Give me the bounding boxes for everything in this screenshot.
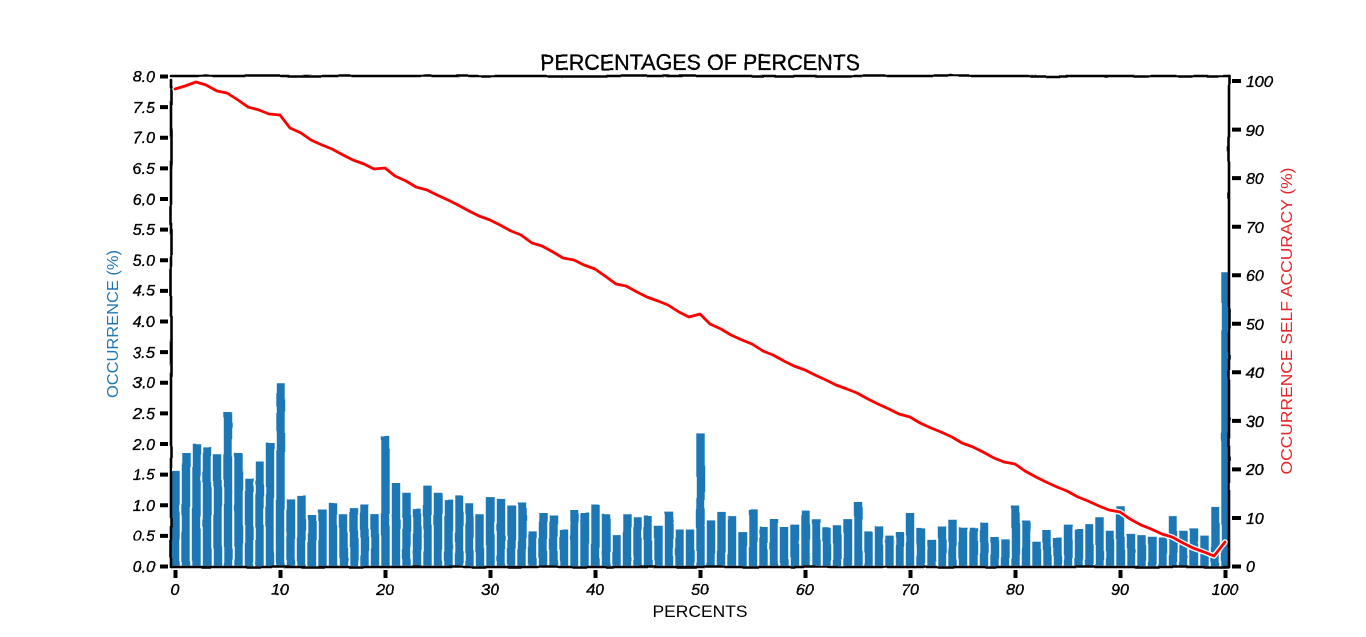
right axis ticks and labels: 60 — [1246, 268, 1264, 285]
bottom axis ticks and labels: 20 — [375, 582, 394, 599]
left axis ticks and labels: 7.0 — [133, 130, 155, 147]
right axis ticks and labels: 10 — [1246, 511, 1264, 528]
left axis ticks and labels: 2.5 — [132, 406, 155, 423]
left axis ticks and labels — [132, 69, 168, 576]
right axis ticks and labels: 100 — [1246, 74, 1273, 91]
bottom axis ticks and labels: 60 — [796, 582, 814, 599]
right axis ticks and labels: 0 — [1246, 559, 1255, 576]
right axis ticks and labels — [1232, 74, 1273, 576]
bottom axis ticks and labels: 10 — [271, 582, 289, 599]
left axis ticks and labels: 1.5 — [133, 467, 155, 484]
bottom axis ticks and labels: 40 — [586, 582, 604, 599]
bar chart: occurrence by percent value — [171, 272, 1230, 566]
left axis ticks and labels: 6.5 — [133, 161, 155, 178]
left axis ticks and labels: 0.0 — [133, 559, 155, 576]
left axis ticks and labels: 3.5 — [133, 345, 155, 362]
right axis ticks and labels: 80 — [1246, 171, 1264, 188]
bottom axis ticks and labels: 50 — [691, 582, 709, 599]
right axis ticks and labels: 70 — [1246, 220, 1264, 237]
right axis ticks and labels: 90 — [1246, 123, 1264, 140]
left axis ticks and labels: 8.0 — [133, 69, 155, 86]
left axis ticks and labels: 5.5 — [133, 222, 155, 239]
right y axis label: OCCURRENCE SELF ACCURACY (%) — [1279, 168, 1296, 474]
title: PERCENTAGES OF PERCENTS — [540, 50, 860, 75]
right axis ticks and labels: 20 — [1245, 462, 1264, 479]
x axis label: PERCENTS — [652, 602, 748, 621]
right axis ticks and labels: 50 — [1246, 317, 1264, 334]
bottom axis ticks and labels — [171, 570, 1238, 599]
right axis ticks and labels: 40 — [1246, 365, 1264, 382]
bottom axis ticks and labels: 0 — [171, 582, 180, 599]
axes frame — [171, 76, 1229, 567]
right axis ticks and labels: 30 — [1246, 414, 1264, 431]
left y axis label: OCCURRENCE (%) — [105, 250, 122, 398]
left axis ticks and labels: 2.0 — [132, 437, 155, 454]
left axis ticks and labels: 5.0 — [133, 253, 155, 270]
bottom axis ticks and labels: 100 — [1212, 582, 1238, 599]
left axis ticks and labels: 6.0 — [133, 192, 155, 209]
bottom axis ticks and labels: 70 — [901, 582, 919, 599]
left axis ticks and labels: 7.5 — [133, 100, 155, 117]
left axis ticks and labels: 4.0 — [133, 314, 155, 331]
left axis ticks and labels: 1.0 — [133, 498, 155, 515]
left axis ticks and labels: 3.0 — [133, 375, 155, 392]
bottom axis ticks and labels: 30 — [481, 582, 499, 599]
left axis ticks and labels: 0.5 — [133, 528, 155, 545]
bottom axis ticks and labels: 90 — [1111, 582, 1129, 599]
red line: occurrence self accuracy — [175, 82, 1225, 556]
bottom axis ticks and labels: 80 — [1006, 582, 1024, 599]
left axis ticks and labels: 4.5 — [133, 283, 155, 300]
